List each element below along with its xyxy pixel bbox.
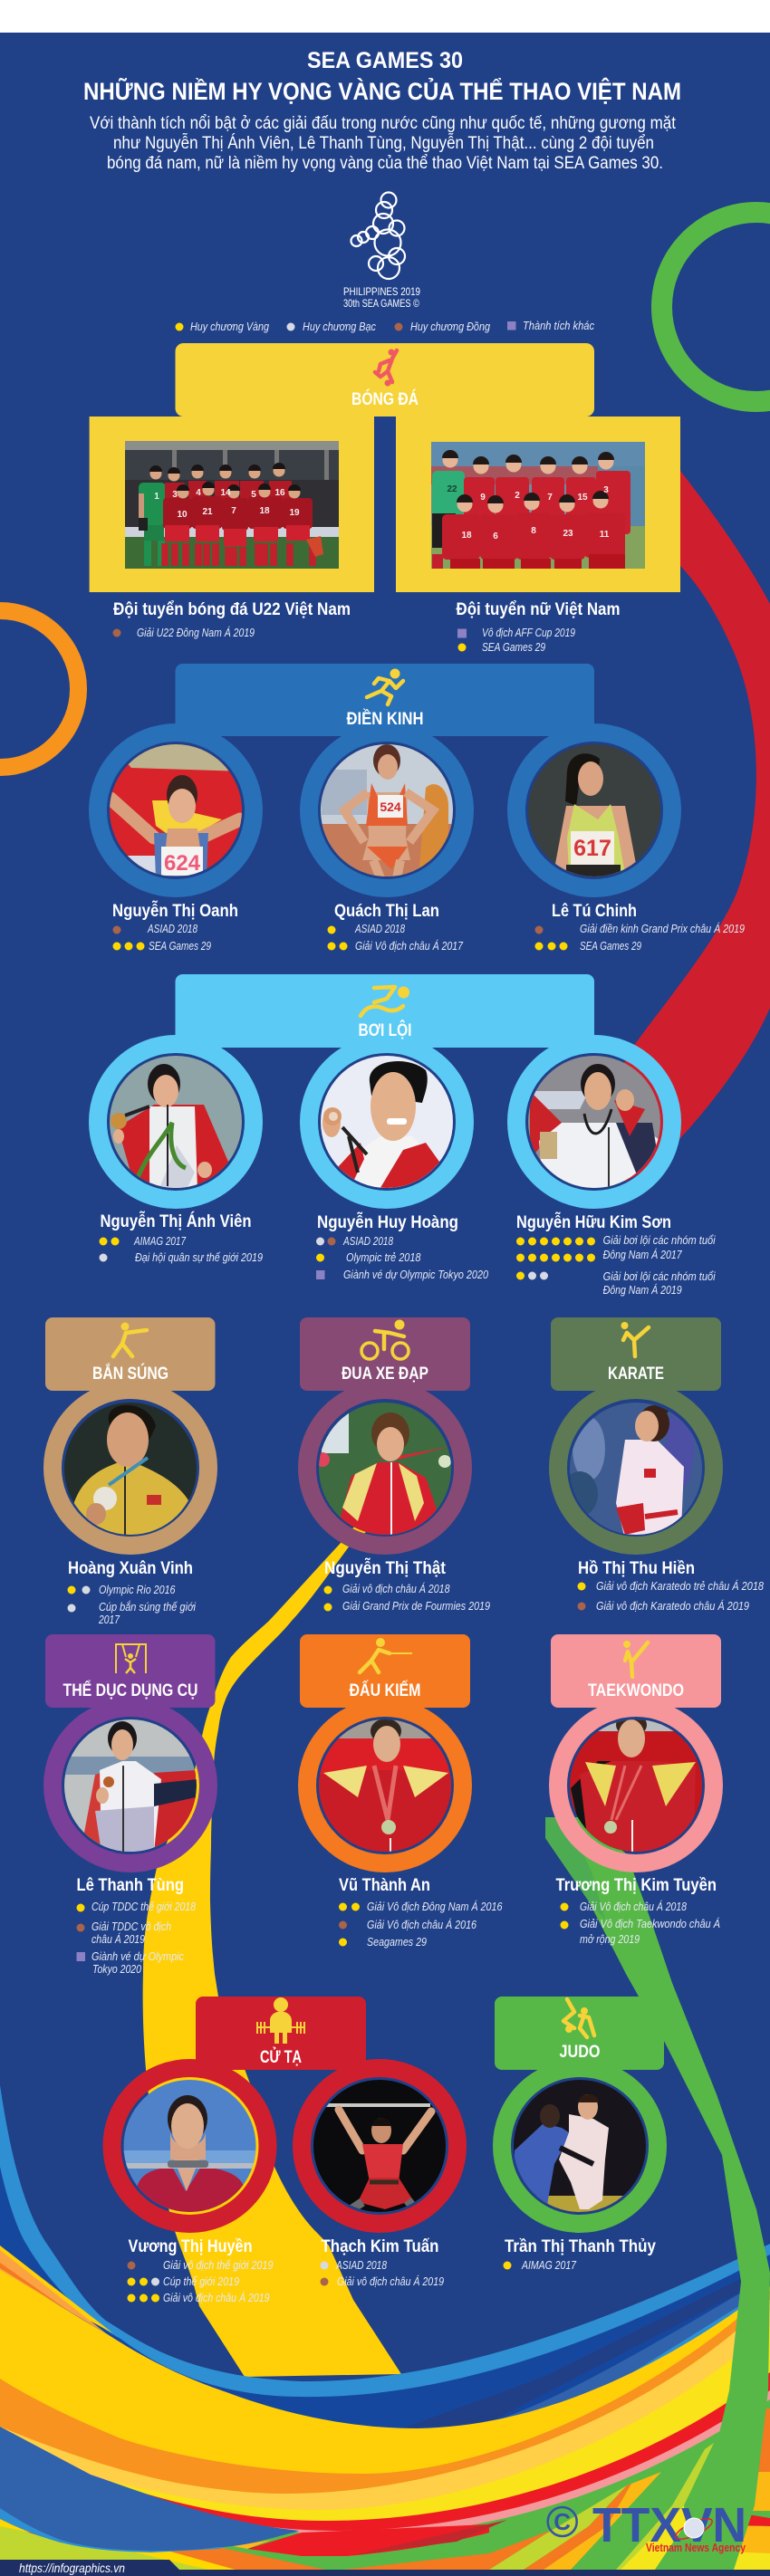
legend: [176, 320, 595, 333]
athlete: Lê Tú Chinh: 617: [573, 836, 611, 861]
athlete: Lê Thanh Tùng: Giành vé dự Olympic: [91, 1950, 185, 1963]
panel: U22 team: [90, 417, 374, 592]
athlete: Nguyễn Huy Hoàng: Olympic trẻ 2018: [346, 1251, 421, 1264]
athlete: Nguyễn Thị Thật: [315, 1402, 490, 1613]
intro text: như Nguyễn Thị Ánh Viên, Lê Thanh Tùng, Nguyễn Thị Thật... cùng 2 đội tuyển: [113, 133, 654, 153]
panel: women's team: 8: [531, 526, 536, 536]
athlete: Nguyễn Thị Ánh Viên: Nguyễn Thị Ánh Viên: [100, 1211, 252, 1231]
panel: women's team: 2: [515, 491, 520, 501]
legend: Huy chương Bạc: [303, 321, 377, 333]
tab: Đấu kiếm: ĐẤU KIẾM: [350, 1681, 420, 1700]
logo: TTXVN: TTXVN: [592, 2498, 746, 2552]
athlete: Quách Thị Lan: ASIAD 2018: [354, 923, 405, 935]
panel: women's team: 3: [603, 485, 609, 495]
tab: Bóng đá: [176, 343, 594, 417]
panel: women's team: 23: [563, 529, 573, 539]
athlete: Nguyễn Hữu Kim Sơn: Nguyễn Hữu Kim Sơn: [516, 1212, 671, 1232]
panel: women's team: 22: [447, 484, 457, 494]
athlete: Vũ Thành An: Giải Vô địch Đông Nam Á 2016: [367, 1900, 503, 1913]
athlete: Vương Thị Huyền: Cúp thế giới 2019: [163, 2275, 239, 2288]
section: Taekwondo: [0, 1634, 770, 2576]
athlete: Lê Tú Chinh: Lê Tú Chinh: [552, 902, 637, 921]
tab: Điền kinh: ĐIỀN KINH: [346, 709, 424, 729]
tab: Karate: KARATE: [608, 1365, 664, 1384]
section: Điền kinh: [98, 664, 745, 953]
legend: Thành tích khác: [523, 320, 595, 332]
caption: U22 team: [112, 600, 351, 639]
tab: Bắn súng: BẮN SÚNG: [92, 1364, 168, 1384]
athlete: Lê Tú Chinh: Giải điền kinh Grand Prix châu Á 2019: [580, 922, 745, 935]
athlete: Vũ Thành An: [317, 1719, 503, 1949]
legend: Huy chương Vàng: [190, 321, 269, 333]
intro text: Với thành tích nổi bật ở các giải đấu trong nước cũng như quốc tế, những gương mặt: [90, 114, 677, 133]
tab: Bắn súng: [45, 1317, 216, 1546]
athlete: Nguyễn Thị Oanh: ASIAD 2018: [147, 923, 197, 935]
athlete: Vũ Thành An: Seagames 29: [367, 1936, 427, 1949]
title: SEA GAMES 30: [307, 48, 463, 73]
logo: SEA Games rings: [343, 192, 420, 310]
footer bar: [0, 2560, 770, 2576]
athlete: Trần Thị Thanh Thủy: AIMAG 2017: [521, 2259, 577, 2272]
section: Thể dục dụng cụ: [0, 1634, 770, 2576]
panel: U22 team: 14: [220, 488, 231, 498]
tab: Taekwondo: TAEKWONDO: [588, 1681, 684, 1700]
logo: TTXVN: Vietnam News Agency: [646, 2541, 746, 2554]
tab: Cử tạ: CỬ TẠ: [260, 2047, 302, 2067]
athlete: Nguyễn Thị Ánh Viên: [100, 1055, 263, 1264]
legend: Huy chương Đồng: [410, 321, 490, 333]
athlete: Nguyễn Huy Hoàng: ASIAD 2018: [342, 1235, 393, 1248]
athlete: Hồ Thị Thu Hiền: Giải vô địch Karatedo châu Á 2019: [596, 1599, 749, 1613]
athlete: Nguyễn Thị Thật: Giải Grand Prix de Fourmies 2019: [342, 1600, 490, 1613]
intro text: bóng đá nam, nữ là niềm hy vọng vàng của thể thao Việt Nam tại SEA Games 30.: [107, 154, 663, 173]
tab: Judo: JUDO: [560, 2043, 600, 2062]
panel: U22 team: 19: [289, 508, 300, 518]
athlete: Thạch Kim Tuấn: Thạch Kim Tuấn: [321, 2237, 438, 2256]
tab: Bơi lội: [98, 974, 672, 1200]
panel: U22 team: 18: [259, 506, 270, 516]
section: Bắn súng: [0, 1317, 770, 2576]
athlete: Quách Thị Lan: 524: [380, 800, 401, 814]
tab: Taekwondo: [551, 1634, 721, 1863]
athlete: Nguyễn Huy Hoàng: Giành vé dự Olympic Tokyo 2020: [343, 1269, 488, 1281]
panel: women's team: 15: [577, 493, 588, 503]
section: Đua xe đạp: [0, 1317, 770, 2576]
tab: Đua xe đạp: ĐUA XE ĐẠP: [342, 1365, 428, 1384]
footer bar: https://infographics.vn: [19, 2561, 125, 2575]
athlete: Trương Thị Kim Tuyền: [556, 1713, 720, 1946]
athlete: Hoàng Xuân Vinh: [63, 1402, 197, 1626]
athlete: Thạch Kim Tuấn: ASIAD 2018: [335, 2259, 387, 2272]
section: Bơi lội: [98, 974, 717, 1297]
athlete: Vũ Thành An: Vũ Thành An: [339, 1876, 430, 1895]
athlete: Lê Thanh Tùng: Lê Thanh Tùng: [76, 1876, 184, 1895]
panel: U22 team: 3: [172, 490, 178, 500]
decoration: green swoosh: [545, 1817, 770, 2570]
athlete: Nguyễn Hữu Kim Sơn: Đông Nam Á 2019: [603, 1283, 682, 1297]
panel: U22 team: 16: [274, 488, 285, 498]
athlete: Hồ Thị Thu Hiền: Hồ Thị Thu Hiền: [578, 1559, 695, 1578]
title: NHỮNG NIỀM HY VỌNG VÀNG CỦA THỂ THAO VIỆT NAM: [83, 76, 681, 105]
athlete: Thạch Kim Tuấn: [313, 2080, 447, 2288]
panel: women's team: 9: [480, 493, 486, 503]
athlete: Nguyễn Thị Oanh: Nguyễn Thị Oanh: [112, 901, 238, 921]
tab: Đấu kiếm: [300, 1634, 470, 1863]
panel: U22 team: 21: [202, 507, 213, 517]
logo: SEA Games rings: 30th SEA GAMES ©: [343, 297, 419, 310]
panel: women's team: 7: [547, 493, 553, 503]
caption: women's team: Vô địch AFF Cup 2019: [482, 627, 575, 639]
decoration: ribbons at the bottom: [0, 2085, 770, 2576]
athlete: Lê Thanh Tùng: Cúp TDDC thế giới 2018: [91, 1901, 196, 1913]
athlete: Vương Thị Huyền: Giải vô địch châu Á 2019: [163, 2291, 270, 2304]
tab: Bơi lội: BƠI LỘI: [359, 1020, 411, 1040]
panel: women's team: 18: [461, 531, 472, 541]
tab: Karate: [551, 1317, 721, 1546]
athlete: Trần Thị Thanh Thủy: Trần Thị Thanh Thủy: [505, 2237, 656, 2256]
athlete: Lê Thanh Tùng: châu Á 2019: [91, 1932, 145, 1946]
athlete: Nguyễn Hữu Kim Sơn: Đông Nam Á 2017: [603, 1248, 682, 1261]
intro text: [90, 114, 677, 173]
athlete: Vương Thị Huyền: [123, 2080, 274, 2304]
athlete: Nguyễn Thị Ánh Viên: Đại hội quân sự thế giới 2019: [135, 1251, 263, 1264]
tab: Judo: [495, 1997, 664, 2224]
athlete: Quách Thị Lan: [317, 742, 464, 953]
tab: Điền kinh: [98, 664, 672, 888]
athlete: Nguyễn Thị Oanh: [109, 742, 245, 953]
athlete: Lê Thanh Tùng: [63, 1719, 197, 1976]
athlete: Lê Thanh Tùng: Tokyo 2020: [92, 1963, 141, 1976]
title: [83, 48, 681, 105]
athlete: Nguyễn Thị Thật: Nguyễn Thị Thật: [324, 1558, 447, 1578]
section: Bóng đá: [90, 343, 680, 654]
section: Đấu kiếm: [0, 1634, 770, 2576]
athlete: Hoàng Xuân Vinh: Olympic Rio 2016: [99, 1584, 176, 1596]
panel: U22 team: 5: [251, 490, 256, 500]
athlete: Lê Thanh Tùng: Giải TDDC vô địch: [91, 1920, 171, 1933]
caption: women's team: SEA Games 29: [482, 641, 545, 654]
tab: Thể dục dụng cụ: THỂ DỤC DỤNG CỤ: [63, 1681, 197, 1700]
panel: women's team: 11: [600, 530, 610, 540]
athlete: Trương Thị Kim Tuyền: Giải Vô địch Taekwondo châu Á: [580, 1917, 720, 1930]
athlete: Nguyễn Huy Hoàng: [316, 1055, 488, 1281]
athlete: Nguyễn Hữu Kim Sơn: Giải bơi lội các nhóm tuổi: [603, 1234, 717, 1247]
section: Cử tạ: [112, 1997, 457, 2304]
athlete: Nguyễn Thị Thật: Giải vô địch châu Á 2018: [342, 1582, 450, 1595]
athlete: Trương Thị Kim Tuyền: Trương Thị Kim Tuyền: [556, 1876, 717, 1895]
athlete: Hoàng Xuân Vinh: Cúp bắn súng thế giới: [99, 1600, 197, 1614]
panel: U22 team: 7: [231, 506, 236, 516]
athlete: Lê Tú Chinh: SEA Games 29: [580, 940, 641, 953]
athlete: Hoàng Xuân Vinh: Hoàng Xuân Vinh: [68, 1559, 193, 1578]
athlete: Trương Thị Kim Tuyền: mở rộng 2019: [580, 1933, 640, 1946]
decoration: red swoosh: [616, 471, 770, 1182]
athlete: Vũ Thành An: Giải Vô địch châu Á 2016: [367, 1918, 476, 1931]
section: Judo: [495, 1997, 664, 2272]
decoration: darker green part: [545, 1817, 605, 1920]
athlete: Quách Thị Lan: Giải Vô địch châu Á 2017: [355, 939, 464, 953]
panel: U22 team: 1: [154, 492, 159, 502]
athlete: Lê Tú Chinh: [525, 742, 745, 953]
caption: women's team: Đội tuyển nữ Việt Nam: [457, 600, 620, 619]
athlete: Nguyễn Hữu Kim Sơn: Giải bơi lội các nhóm tuổi: [603, 1270, 717, 1283]
tab: Đua xe đạp: [300, 1317, 470, 1546]
caption: women's team: [457, 600, 620, 654]
athlete: Hoàng Xuân Vinh: 2017: [98, 1614, 120, 1626]
panel: women's team: [396, 417, 680, 592]
athlete: Nguyễn Thị Oanh: SEA Games 29: [149, 940, 211, 953]
section: Karate: [0, 1317, 770, 2576]
caption: U22 team: Giải U22 Đông Nam Á 2019: [137, 626, 255, 639]
tab: Cử tạ: [112, 1997, 457, 2224]
athlete: Nguyễn Thị Oanh: 624: [164, 851, 201, 876]
athlete: Nguyễn Hữu Kim Sơn: [516, 1055, 717, 1297]
athlete: Quách Thị Lan: Quách Thị Lan: [334, 902, 439, 921]
athlete: Trương Thị Kim Tuyền: Giải Vô địch châu Á 2018: [580, 1900, 687, 1913]
logo: TTXVN: C: [553, 2508, 571, 2535]
athlete: Vương Thị Huyền: Vương Thị Huyền: [129, 2237, 252, 2256]
athlete: Nguyễn Huy Hoàng: Nguyễn Huy Hoàng: [317, 1212, 458, 1232]
logo: SEA Games rings: PHILIPPINES 2019: [343, 285, 420, 298]
caption: U22 team: Đội tuyển bóng đá U22 Việt Nam: [113, 600, 351, 619]
athlete: Vương Thị Huyền: Giải vô địch thế giới 2019: [163, 2259, 274, 2272]
athlete: Thạch Kim Tuấn: Giải vô địch châu Á 2019: [337, 2274, 444, 2288]
decoration: yellow swoosh: [143, 1527, 401, 2377]
panel: U22 team: 10: [177, 510, 188, 520]
tab: Bóng đá: BÓNG ĐÁ: [351, 389, 419, 409]
decoration: orange ring: [0, 610, 78, 768]
athlete: Trần Thị Thanh Thủy: [504, 2080, 656, 2272]
panel: U22 team: 4: [196, 488, 201, 498]
athlete: Nguyễn Thị Ánh Viên: AIMAG 2017: [133, 1235, 187, 1248]
decoration: green ring: [661, 212, 770, 402]
athlete: Hồ Thị Thu Hiền: [562, 1402, 764, 1613]
panel: women's team: 6: [493, 531, 498, 541]
tab: Thể dục dụng cụ: [45, 1634, 216, 1863]
